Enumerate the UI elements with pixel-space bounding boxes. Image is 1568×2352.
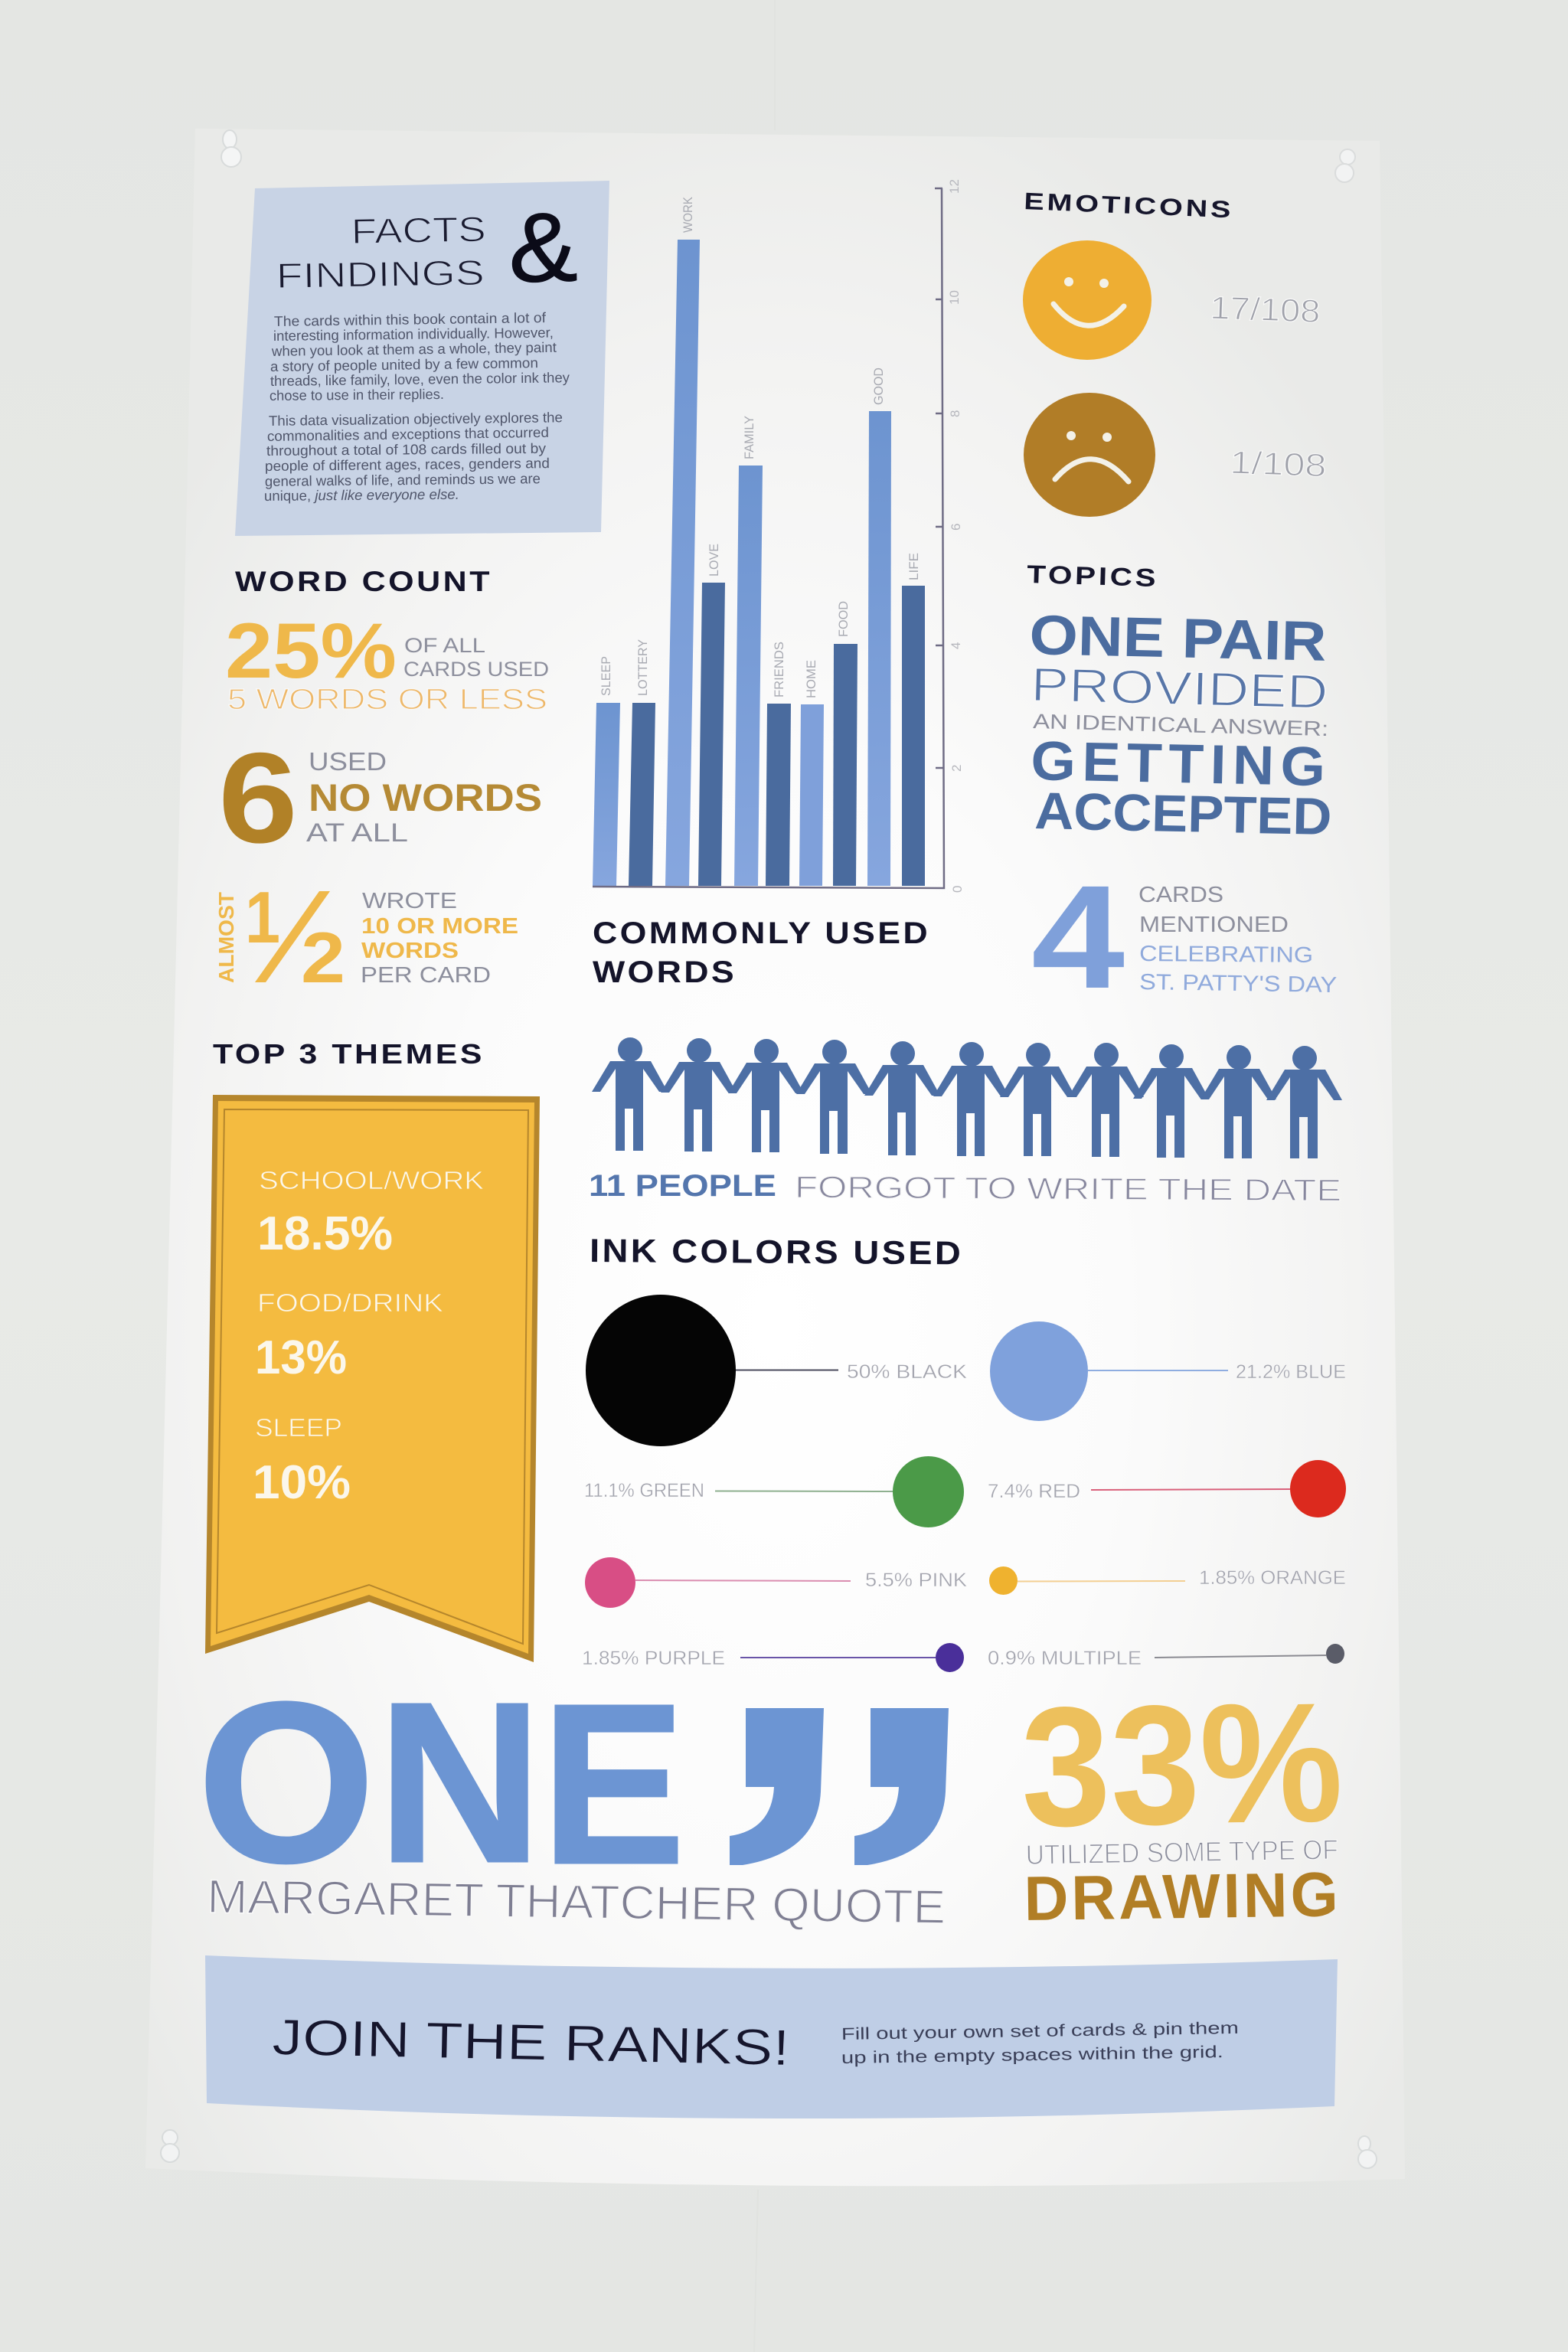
axis labels: 8 — [948, 410, 962, 417]
heading: word count: WORD COUNT — [235, 566, 492, 597]
bar labels: GOOD — [871, 368, 886, 405]
stat: 4 cards: CELEBRATING — [1139, 942, 1313, 968]
stat: 25 percent — [225, 607, 549, 716]
theme: sleep: 10% — [253, 1456, 351, 1509]
caption: utilized some type of: UTILIZED SOME TYPE OF — [1025, 1834, 1338, 1870]
icon: row of people holding hands — [592, 1037, 1342, 1158]
statement: one pair provided an identical answer: PROVIDED — [1031, 658, 1328, 719]
heading: commonly used words: COMMONLY USED — [593, 916, 930, 950]
poster sheet — [145, 129, 1405, 2186]
statement: one pair provided an identical answer: AN IDENTICAL ANSWER: — [1033, 710, 1328, 740]
bar labels: LOVE — [707, 544, 721, 577]
heading: commonly used words — [593, 916, 930, 989]
stat: 6 used no words — [218, 726, 542, 870]
theme: sleep — [253, 1413, 351, 1509]
panel: word count — [214, 566, 549, 998]
bar labels: FOOD — [836, 601, 851, 637]
caption: 11 people forgot to write the date: FORGOT TO WRITE THE DATE — [795, 1171, 1341, 1207]
ink: green: 11.1% GREEN — [584, 1480, 704, 1501]
panel: 33 percent drawing — [1020, 1668, 1344, 1934]
text block: intro: people of different ages, races, genders and — [265, 455, 550, 474]
theme: sleep: SLEEP — [255, 1413, 342, 1442]
stat: 6 used no words: NO WORDS — [309, 776, 542, 819]
theme: food and drink: FOOD/DRINK — [257, 1289, 443, 1317]
stat: almost one half: PER CARD — [361, 963, 491, 988]
text block: call to action: Fill out your own set of cards & pin them — [841, 2018, 1239, 2043]
bar labels: FAMILY — [742, 416, 756, 459]
icon: smiley — [1023, 240, 1152, 360]
stat: 1 of 108: 1/108 — [1230, 444, 1327, 483]
bar labels: FRIENDS — [772, 642, 786, 697]
heading: facts and findings: FACTS — [351, 209, 486, 251]
heading: top 3 themes: TOP 3 THEMES — [213, 1038, 485, 1070]
caption: 11 people forgot to write the date: 11 PEOPLE — [589, 1169, 776, 1203]
text block: intro: interesting information individually. However, — [273, 325, 554, 344]
stat: 25 percent: CARDS USED — [403, 658, 549, 681]
stat: almost one half: 1 — [245, 877, 280, 959]
heading: emoticons: EMOTICONS — [1024, 188, 1234, 223]
ink: pink: 5.5% PINK — [865, 1570, 967, 1591]
panel: emoticons — [1023, 188, 1327, 517]
heading: facts and findings: FINDINGS — [276, 253, 485, 296]
ink: orange: 1.85% ORANGE — [1199, 1567, 1346, 1589]
ink: blue — [990, 1321, 1346, 1421]
stat: 6 used no words: USED — [309, 747, 387, 776]
heading: facts and findings: & — [508, 192, 578, 303]
text block: intro: This data visualization objectively explores the — [269, 409, 563, 429]
panel: 11 people — [589, 1037, 1342, 1207]
axis labels: 0 — [950, 886, 965, 893]
axis labels: 6 — [949, 524, 963, 531]
icon: push pin bottom right — [1358, 2136, 1377, 2168]
stat: almost one half — [214, 877, 518, 998]
heading: ink colors used: INK COLORS USED — [590, 1233, 963, 1272]
bar labels: HOME — [804, 660, 818, 698]
icon: push pin top left — [221, 130, 241, 167]
text block: intro: general walks of life, and reminds us we are — [265, 470, 541, 489]
stat word: one: ON — [198, 1655, 542, 1910]
stat: almost one half: 10 OR MORE — [361, 914, 518, 939]
text block: intro: The cards within this book contain a lot of — [274, 309, 547, 329]
stat: 25 percent: OF ALL — [404, 634, 485, 657]
text block: intro: a story of people united by a few common — [270, 354, 538, 374]
heading: join the ranks: JOIN THE RANKS! — [272, 2008, 790, 2076]
text block: intro: chose to use in their replies. — [270, 386, 444, 403]
bar labels: LOTTERY — [635, 639, 650, 696]
panel: join the ranks — [205, 1955, 1338, 2118]
statement: one pair provided an identical answer: ONE PAIR — [1029, 604, 1327, 673]
bar labels: SLEEP — [599, 656, 613, 696]
caption: drawing: DRAWING — [1024, 1860, 1341, 1934]
ink: black — [586, 1295, 967, 1446]
stat: 25 percent: 5 WORDS OR LESS — [227, 684, 547, 716]
panel: facts and findings — [235, 181, 609, 536]
ink: multiple: 0.9% MULTIPLE — [988, 1648, 1142, 1669]
stat: 4 cards — [1031, 854, 1337, 1019]
stat: 4 cards: CARDS — [1138, 883, 1223, 907]
stat: almost one half: 2 — [301, 917, 345, 998]
panel: top 3 themes — [205, 1038, 540, 1662]
caption: 11 people forgot to write the date — [589, 1169, 1341, 1207]
text block: intro: unique, just like everyone else. — [264, 486, 459, 504]
theme: food and drink: 13% — [255, 1331, 347, 1384]
ink: multiple — [988, 1644, 1344, 1669]
icon: push pin bottom left — [161, 2130, 179, 2162]
text block: intro: commonalities and exceptions that occurred — [267, 424, 549, 444]
ink: blue: 21.2% BLUE — [1236, 1361, 1346, 1383]
theme: school and work: SCHOOL/WORK — [259, 1166, 484, 1194]
bar labels: LIFE — [906, 553, 921, 580]
icon: push pin top right — [1335, 149, 1355, 182]
ribbon banner — [205, 1095, 540, 1662]
text block: intro: throughout a total of 108 cards filled out by — [266, 440, 547, 459]
stat: 6 used no words: AT ALL — [306, 818, 408, 848]
stat: 6 used no words: 6 — [218, 726, 298, 870]
panel: one margaret thatcher quote — [198, 1655, 949, 1934]
statement: one pair provided an identical answer: ACCEPTED — [1034, 782, 1332, 846]
icon: frowny — [1024, 393, 1155, 517]
ink: orange — [989, 1566, 1346, 1595]
stat: 33 percent: 33% — [1020, 1668, 1344, 1863]
statement: one pair provided an identical answer — [1029, 604, 1332, 846]
bar labels — [599, 196, 921, 698]
text block: call to action — [841, 2018, 1239, 2067]
stat: almost one half: ALMOST — [214, 892, 238, 983]
panel: ink colors used — [582, 1233, 1346, 1672]
text block: call to action: up in the empty spaces within the grid. — [841, 2042, 1223, 2067]
stat: 17 of 108: 17/108 — [1210, 289, 1321, 329]
stat: almost one half: WORDS — [361, 939, 459, 963]
stat word: one: E — [541, 1657, 685, 1912]
axis labels: 10 — [947, 290, 962, 305]
stat: 25 percent: 25% — [225, 607, 397, 694]
stat: 4 cards: MENTIONED — [1139, 913, 1289, 937]
axis labels — [947, 179, 965, 893]
bar labels: WORK — [681, 196, 695, 233]
axis labels: 4 — [949, 642, 963, 649]
caption: margaret thatcher quote: MARGARET THATCHER QUOTE — [207, 1870, 946, 1934]
heading: commonly used words: WORDS — [593, 956, 737, 989]
ink: pink — [585, 1557, 967, 1608]
ink: red — [988, 1460, 1346, 1517]
axis labels: 12 — [947, 179, 962, 194]
bar chart: commonly used words — [593, 179, 965, 989]
chart bars — [593, 240, 925, 886]
ink: green — [584, 1456, 964, 1527]
heading: facts and findings — [276, 192, 578, 303]
chart axes — [593, 188, 944, 888]
text block: intro: threads, like family, love, even the color ink they — [270, 369, 570, 389]
heading: topics: TOPICS — [1027, 560, 1159, 592]
text block: intro — [264, 309, 570, 504]
stat: 4 cards: ST. PATTY'S DAY — [1139, 970, 1337, 998]
panel: topics — [1027, 560, 1337, 1019]
ink: purple: 1.85% PURPLE — [582, 1648, 725, 1669]
stat: almost one half: WROTE — [362, 889, 457, 913]
ink: purple — [582, 1643, 964, 1672]
theme: school and work: 18.5% — [257, 1207, 393, 1260]
theme: school and work — [257, 1166, 484, 1260]
text block: intro: when you look at them as a whole, they paint — [271, 339, 557, 359]
axis labels: 2 — [949, 765, 964, 772]
stat: 4 cards: 4 — [1031, 854, 1125, 1019]
ink: red: 7.4% RED — [988, 1481, 1080, 1502]
statement: one pair provided an identical answer: GETTING — [1031, 730, 1332, 798]
theme: food and drink — [255, 1289, 443, 1384]
ink: black: 50% BLACK — [847, 1361, 967, 1383]
icon: closing quotation marks — [730, 1708, 949, 1865]
